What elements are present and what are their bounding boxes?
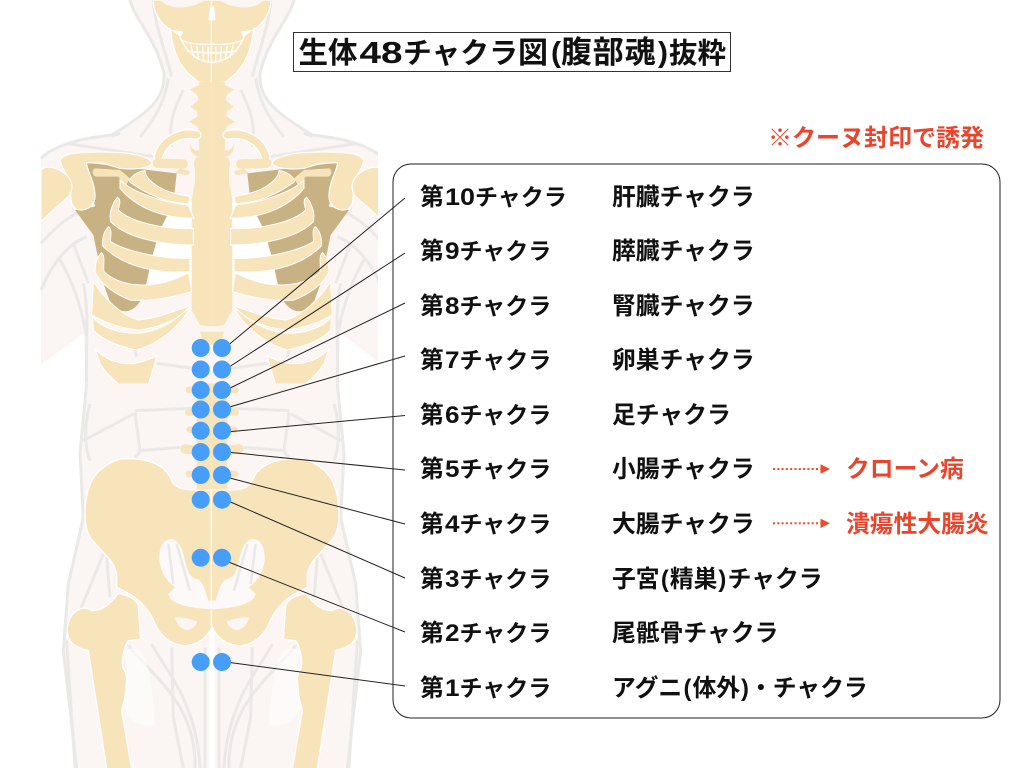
title: 生体 [298,37,358,70]
title: 図 [518,37,548,70]
chakra numbers: チャクラ [460,511,551,537]
chakra names [612,184,868,702]
title: ( [551,37,561,69]
chakra numbers: 7 [445,347,460,374]
title: ) [658,37,668,69]
chakra numbers: 5 [445,456,460,483]
chakra names: 尾骶骨チャクラ [612,620,778,647]
arrow: large intestine to ulcerative colitis [773,519,830,528]
chakra numbers: 10 [445,184,475,211]
chakra names: 肝臓チャクラ [612,184,755,211]
chakra points [192,339,231,671]
callout: Kundalini seal note: ※クーヌ封印で誘発 [768,125,984,152]
chakra numbers: 1 [445,675,460,702]
chakra numbers: チャクラ [460,238,551,264]
chakra numbers: 2 [445,620,460,647]
chakra numbers: 第 [420,566,444,593]
chakra names: 足チャクラ [612,402,731,429]
chakra numbers: 第 [420,456,444,483]
chakra names: アグニ(体外)・チャクラ [612,674,868,702]
chakra numbers: 第 [420,511,444,538]
chakra numbers: 第 [420,620,444,647]
chakra numbers: 4 [445,511,460,538]
chakra numbers: チャクラ [460,456,551,482]
panel: chakra list [393,164,1000,718]
title [294,32,730,72]
chakra numbers: チャクラ [475,184,567,210]
chakra names: 小腸チャクラ [612,456,755,483]
chakra numbers: チャクラ [460,566,551,592]
chakra numbers: 第 [420,675,444,702]
leader lines from chakra points to labels [226,198,405,686]
chakra names: 膵臓チャクラ [612,238,755,265]
chakra numbers: 6 [445,402,460,429]
chakra numbers [420,184,567,702]
chakra numbers: チャクラ [460,675,551,701]
chakra numbers: 第 [420,238,444,265]
chakra numbers: 第 [420,184,444,211]
chakra numbers: 第 [420,293,444,320]
title: 48 [360,35,402,70]
title: 抜粋 [669,38,726,70]
chakra names: 腎臓チャクラ [612,293,755,320]
chakra names: 子宮(精巣)チャクラ [612,566,823,593]
disease label: ulcerative colitis: 潰瘍性大腸炎 [846,511,989,538]
title: 腹部魂 [561,35,656,70]
chakra numbers: 3 [445,566,460,593]
disease label: Crohn's disease: クローン病 [846,456,964,483]
chakra numbers: 8 [445,293,460,320]
chakra numbers: チャクラ [460,293,551,319]
title: チャクラ [403,38,518,70]
chakra numbers: チャクラ [460,402,551,428]
chakra numbers: 9 [445,238,460,265]
chakra numbers: チャクラ [460,620,551,646]
anatomical figure: skeleton and muscles [41,0,394,768]
chakra numbers: 第 [420,347,444,374]
chakra names: 卵巣チャクラ [612,347,755,374]
chakra numbers: チャクラ [460,347,551,373]
chakra names: 大腸チャクラ [612,511,755,538]
arrow: small intestine to Crohn's disease [773,464,830,474]
chakra numbers: 第 [420,402,444,429]
